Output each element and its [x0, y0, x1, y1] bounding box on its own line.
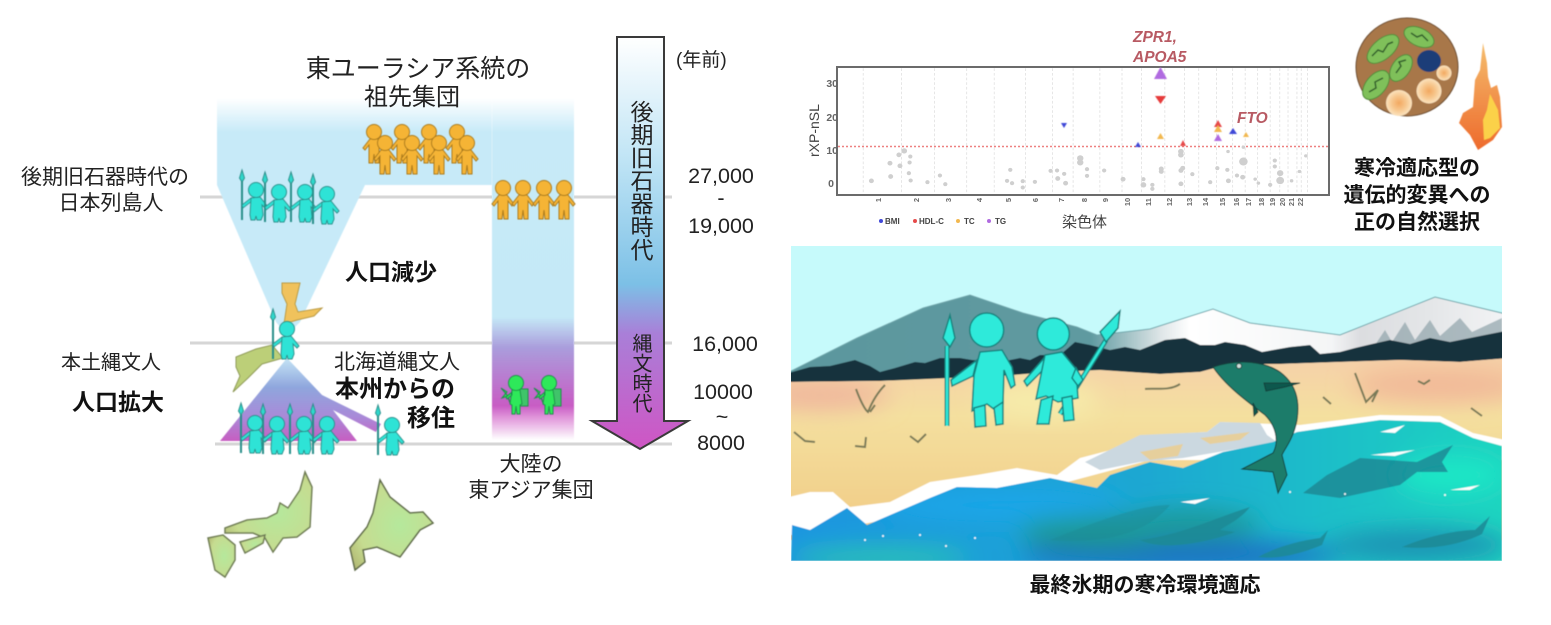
label: Paleolithic Japanese: 日本列島人 [58, 192, 164, 215]
y axis ticks: 20 [826, 112, 838, 124]
gene label: ZPR1, APOA5 [1132, 29, 1187, 66]
timeline arrow [592, 37, 688, 449]
x axis chromosome ticks: 14 [1201, 197, 1210, 206]
icon: small Honshu map [233, 345, 283, 392]
label: Jomon period: 縄文時代 [629, 333, 652, 413]
threshold line [838, 146, 1328, 148]
label: continental east Asians [468, 453, 594, 502]
legend: TG [995, 217, 1006, 226]
icon: Japan flame map [1459, 43, 1502, 150]
beach colour variation [750, 367, 1530, 418]
label: continental east Asians: 大陸の [500, 453, 562, 476]
label: migration from Honshu: 本州からの [335, 376, 455, 403]
time scale numbers: 27,000 [688, 164, 754, 188]
x axis chromosome ticks: 18 [1257, 198, 1266, 206]
x axis chromosome ticks: 21 [1287, 198, 1296, 206]
time scale numbers [688, 164, 758, 455]
x axis chromosome ticks: 20 [1278, 198, 1287, 206]
label: Paleolithic Japanese: 後期旧石器時代の [21, 166, 189, 189]
time scale numbers: ~ [716, 405, 728, 429]
grass tufts [794, 373, 1482, 447]
icons: continental farmers [501, 376, 561, 414]
icons: continental group [492, 180, 575, 219]
label: years ago: (年前) [676, 49, 727, 71]
significant markers [1061, 67, 1249, 147]
x axis chromosome ticks: 1 [874, 198, 883, 202]
plot frame [837, 67, 1329, 195]
label: continental east Asians: 東アジア集団 [468, 479, 594, 502]
icons: Jomon hunters [238, 403, 339, 454]
text: positive selection caption: 正の自然選択 [1354, 210, 1480, 234]
gene label: FTO: FTO [1237, 110, 1268, 127]
x axis chromosome ticks: 2 [912, 198, 921, 202]
text: positive selection caption [1344, 157, 1490, 234]
sea colour variation [790, 455, 1510, 571]
x axis chromosome ticks: 22 [1296, 198, 1305, 206]
right person with spear [1024, 311, 1120, 424]
label: population decline: 人口減少 [345, 259, 437, 285]
x axis chromosome ticks: 13 [1185, 198, 1194, 206]
surf foam [785, 415, 1510, 535]
label: Honshu Jomon: 本土縄文人 [61, 351, 161, 374]
gene label: ZPR1, APOA5: ZPR1, [1132, 29, 1177, 46]
x axis chromosome ticks: 4 [975, 197, 984, 202]
caption: ice age adaptation: 最終氷期の寒冷環境適応 [1030, 574, 1260, 597]
time scale numbers: 8000 [697, 431, 745, 455]
forest line [785, 330, 1510, 382]
x axis chromosome ticks: 15 [1218, 198, 1227, 206]
jumping fish [1213, 362, 1300, 493]
Jomon expansion triangle [220, 358, 381, 441]
heading: ancestral population: 東ユーラシア系統の [306, 55, 530, 83]
x axis chromosome ticks: 10 [1123, 198, 1132, 206]
x axis chromosome ticks: 17 [1244, 198, 1253, 206]
icons: Paleolithic hunters [240, 170, 339, 224]
icon: fat cell with mitochondria [1356, 18, 1458, 116]
sea [791, 419, 1502, 561]
x axis chromosome ticks: 9 [1101, 198, 1110, 202]
timeline gridlines [190, 197, 672, 444]
x axis chromosome ticks: 8 [1080, 198, 1089, 202]
gene label: ZPR1, APOA5: APOA5 [1132, 49, 1187, 66]
icon: single Jomon hunter [270, 309, 299, 359]
mountains [785, 295, 1510, 380]
chromosome gridlines [863, 68, 1308, 194]
legend: HDL-C [919, 217, 944, 226]
x axis chromosome ticks: 16 [1232, 198, 1241, 206]
sparkles [864, 425, 1480, 547]
icons: ancestral population group [363, 124, 478, 174]
sky [785, 240, 1510, 565]
left person with spear [943, 313, 1015, 427]
y axis title: rXP-nSL [806, 104, 822, 157]
shadow fish [1050, 445, 1490, 558]
time scale numbers: 16,000 [692, 332, 758, 356]
continental east Asian column [492, 98, 574, 440]
icon: small Hokkaido map [282, 283, 322, 324]
shallow water patch [1085, 422, 1277, 470]
non-significant points [869, 146, 1308, 191]
y axis ticks: 0 [828, 178, 834, 190]
label: migration from Honshu: 移住 [407, 405, 455, 432]
x axis chromosome ticks: 7 [1057, 198, 1066, 202]
x axis chromosome ticks: 6 [1031, 198, 1040, 202]
x axis chromosome ticks: 19 [1268, 198, 1277, 206]
y axis ticks: 10 [826, 145, 838, 157]
heading line 2: 祖先集団 [364, 84, 460, 111]
y axis ticks [826, 78, 838, 190]
x axis chromosome ticks: 11 [1144, 198, 1153, 206]
label: Paleolithic period: 後期旧石器時代 [627, 100, 654, 261]
panel: population history [21, 37, 758, 577]
panel: ice age coastal scene [791, 246, 1502, 561]
snowy tree tops [1376, 318, 1502, 345]
scene artwork [791, 246, 1502, 561]
x axis chromosome ticks: 3 [944, 198, 953, 202]
legend: BMI [885, 217, 900, 226]
map: Honshu, Shikoku, Kyushu [208, 472, 312, 577]
label: Hokkaido Jomon: 北海道縄文人 [334, 351, 460, 374]
map: Hokkaido [350, 480, 433, 570]
icon: Hokkaido Jomon hunter [376, 405, 404, 455]
text: positive selection caption: 寒冷適応型の [1354, 157, 1480, 180]
time scale numbers: 19,000 [688, 214, 754, 238]
time scale numbers: 10000 [693, 380, 753, 404]
x axis chromosome ticks [874, 197, 1305, 206]
label: Paleolithic Japanese [21, 166, 189, 215]
ancestral east Eurasian band and Japanese funnel [217, 98, 492, 335]
x axis title: 染色体 [1062, 214, 1107, 231]
text: positive selection caption: 遺伝的変異への [1344, 184, 1490, 207]
x axis chromosome ticks: 12 [1165, 198, 1174, 206]
label: population growth: 人口拡大 [72, 389, 164, 415]
y axis ticks: 30 [826, 78, 838, 90]
legend: TC [964, 217, 975, 226]
panel: selection scan chart [806, 29, 1329, 231]
legend [879, 217, 1006, 226]
sand bars in shallows [1140, 432, 1250, 460]
beach [785, 358, 1510, 540]
x axis chromosome ticks: 5 [1004, 198, 1013, 202]
time scale numbers: - [717, 186, 725, 210]
label: migration from Honshu [335, 376, 455, 432]
